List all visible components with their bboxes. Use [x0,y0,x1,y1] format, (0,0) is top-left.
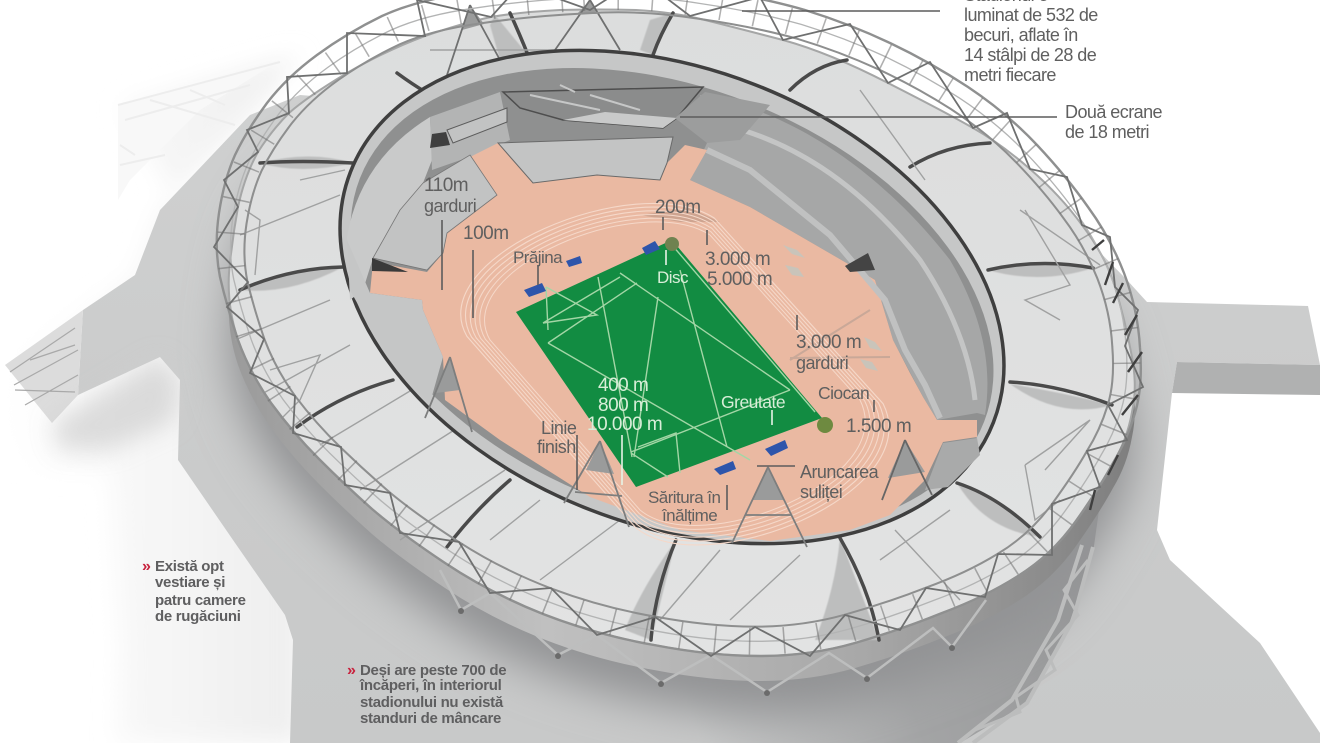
stadium labels: înălțime [661,506,717,525]
box seats [447,108,507,143]
note: changing rooms [142,558,246,625]
stadium labels: 1.500 m [846,416,911,437]
stadium labels: 5.000 m [707,269,772,290]
truss inner chord [244,12,1113,627]
grey crescents under beams [240,13,1112,640]
left stand [373,155,497,270]
note: rooms and food stands: stadionului nu există [360,694,504,711]
stadium labels: Linie [541,418,577,438]
throwing cages and balls [665,237,833,433]
small dark door [845,253,875,272]
stadium labels: 10.000 m [587,414,662,435]
stadium labels: de 18 metri [1065,122,1149,142]
stadium labels: 400 m [598,375,648,396]
lower-left stand [354,282,443,394]
stadium labels: finish [537,437,576,457]
upper back wall [350,68,994,507]
truss middle chord [231,0,1127,641]
stadium labels [424,0,1163,525]
back concourse left [430,92,510,170]
stadium labels: 200m [655,197,701,218]
stadium labels: 3.000 m [705,249,770,270]
stadium outer wall [228,306,1135,681]
dark opening [430,132,450,148]
stadium labels: 14 stâlpi de 28 de [964,45,1097,65]
upper stand plate [503,85,703,128]
inner ring band [338,48,1006,546]
note: rooms and food stands: încăperi, în interiorul [359,677,502,694]
right edge strip [707,150,940,418]
note: changing rooms: de rugăciuni [155,608,241,625]
stadium labels: Greutate [721,392,785,412]
note: changing rooms: » [142,558,151,575]
roof ring [229,10,1135,656]
right arm underside shadow [1172,362,1320,395]
note: rooms and food stands: Deși are peste 700 de [360,662,506,679]
stadium labels: Prăjina [513,248,563,267]
floodlight pylons [425,357,932,547]
lower struts [440,570,986,692]
stadium labels: metri fiecare [964,65,1056,85]
note: rooms and food stands: standuri de mâncare [360,710,501,727]
football pitch [516,240,822,487]
top roof pylon: left [447,5,500,75]
blue jump mats [524,241,788,475]
stadium labels: Două ecrane [1065,102,1163,122]
stadium labels: Săritura în [648,488,720,507]
stadium labels: garduri [424,196,476,216]
cast shadow of stadium [206,202,1156,743]
pitch throwing-sector lines [543,245,815,477]
back tiers [675,92,770,143]
stadium labels: 3.000 m [796,332,861,353]
stadium labels: 110m [424,175,468,196]
stadium labels: 800 m [598,395,648,416]
tan stripes [783,245,882,371]
roof truss [214,0,1143,656]
note: changing rooms: patru camere [155,592,246,609]
left arm of ground [5,310,180,450]
roof panel shading and beams [235,0,1112,640]
stadium labels: luminat de 532 de [964,5,1098,25]
truss zigzag [214,0,1143,656]
stadium labels: suliței [800,482,842,502]
note: changing rooms: vestiare și [155,574,225,591]
top roof pylon: centre [555,0,620,50]
truss dense ticks [231,0,1127,641]
right terrace bands [746,130,978,400]
stadium labels: garduri [796,353,848,373]
stadium labels: becuri, aflate în [964,25,1078,45]
stadium labels: 100m [463,223,509,244]
lower stand centre [498,137,673,183]
right upper terrace [690,95,987,420]
stadium labels: Ciocan [818,383,869,403]
soft ground shadow: left [118,61,293,742]
pink infield surround [370,143,977,541]
note: changing rooms: Există opt [155,558,224,575]
truss outer chord [217,0,1141,656]
note: rooms and food stands [347,662,506,727]
lower right stand [925,438,980,490]
label leader lines [442,11,1057,510]
tan shadow streak [640,208,720,222]
dark beams [240,13,1112,640]
lower strut nodes [458,608,955,696]
running track lanes [461,203,889,545]
dark wedge [372,258,408,272]
stadium labels: Aruncarea [800,462,880,482]
dark truss members on right rim [1090,240,1142,510]
thin roof panel lines [235,50,1100,620]
stadium labels: Disc [657,268,689,287]
left ring band stand [347,117,432,300]
note: rooms and food stands: » [347,662,356,679]
